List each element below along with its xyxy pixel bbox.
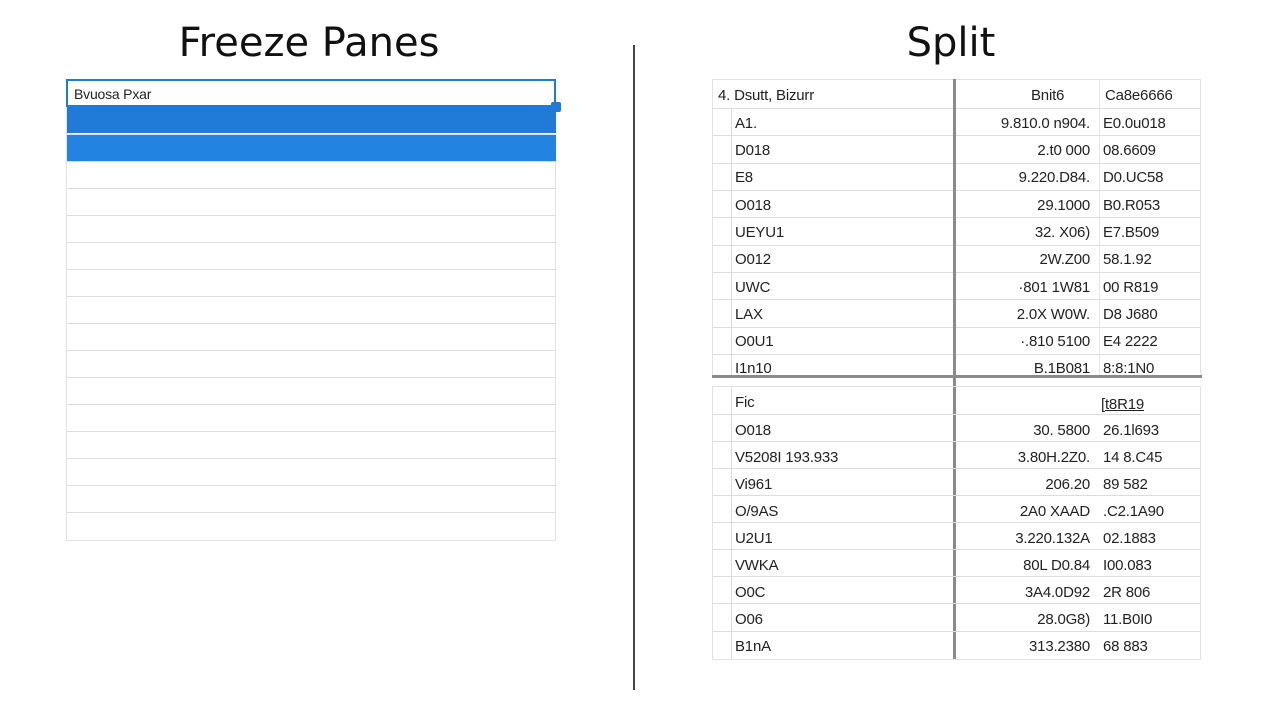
panel: split sheet bottom pane: 14 8.C45 — [1103, 449, 1162, 466]
panel: split sheet bottom pane: 68 883 — [1103, 638, 1148, 655]
title: Split: Split — [907, 20, 995, 66]
panel: split sheet top pane: E8 — [735, 169, 753, 186]
panel: split sheet top pane: 2.0X W0W. — [1017, 306, 1090, 323]
panel: split sheet top pane: Bnit6 — [1031, 87, 1064, 104]
panel: split sheet bottom pane: B1nA — [735, 638, 771, 655]
panel: split sheet top pane — [712, 79, 1201, 376]
panel: split sheet bottom pane: VWKA — [735, 557, 778, 574]
panel: split sheet top pane: UEYU1 — [735, 224, 784, 241]
split horizontal bar — [712, 375, 1202, 378]
panel: split sheet bottom pane: 02.1883 — [1103, 530, 1156, 547]
panel: split sheet bottom pane: 80L D0.84 — [1023, 557, 1090, 574]
panel: split sheet top pane: 08.6609 — [1103, 142, 1156, 159]
panel: split sheet bottom pane: 26.1l693 — [1103, 422, 1159, 439]
panel: split sheet top pane: E4 2222 — [1103, 333, 1157, 350]
panel: split sheet bottom pane: 30. 5800 — [1033, 422, 1090, 439]
panel: split sheet bottom pane: O06 — [735, 611, 763, 628]
panel: split sheet bottom pane: V5208I 193.933 — [735, 449, 838, 466]
panel: split sheet top pane: B0.R053 — [1103, 197, 1160, 214]
panel: split sheet top pane: I1n10 — [735, 360, 772, 377]
panel: split sheet top pane: 32. X06) — [1035, 224, 1090, 241]
panel: split sheet top pane: 29.1000 — [1037, 197, 1090, 214]
panel: split sheet top pane: D0.UC58 — [1103, 169, 1163, 186]
panel: split sheet top pane: D8 J680 — [1103, 306, 1157, 323]
panel: split sheet top pane: E7.B509 — [1103, 224, 1159, 241]
panel: split sheet top pane: 2W.Z00 — [1040, 251, 1090, 268]
split vertical bar — [953, 79, 956, 660]
panel: split sheet top pane: 2.t0 000 — [1037, 142, 1090, 159]
panel: split sheet top pane: 58.1.92 — [1103, 251, 1152, 268]
center divider — [633, 45, 635, 690]
panel: split sheet bottom pane: O/9AS — [735, 503, 778, 520]
panel: split sheet top pane: 8:8:1N0 — [1103, 360, 1154, 377]
panel: split sheet top pane: E0.0u018 — [1103, 115, 1166, 132]
panel: split sheet bottom pane: 2A0 XAAD — [1020, 503, 1090, 520]
panel: split sheet bottom pane: Fic — [735, 394, 754, 411]
panel: split sheet bottom pane — [712, 386, 1201, 660]
panel: split sheet bottom pane: 28.0G8) — [1037, 611, 1090, 628]
panel: split sheet bottom pane: O018 — [735, 422, 771, 439]
panel: split sheet bottom pane: O0C — [735, 584, 765, 601]
panel: split sheet top pane: 9.220.D84. — [1019, 169, 1090, 186]
panel: split sheet bottom pane: 11.B0I0 — [1103, 611, 1152, 628]
panel: split sheet bottom pane: 3A4.0D92 — [1025, 584, 1090, 601]
panel: split sheet bottom pane: I00.083 — [1103, 557, 1152, 574]
panel: split sheet top pane: 9.810.0 n904. — [1001, 115, 1090, 132]
panel: freeze panes sheet — [66, 79, 556, 541]
panel: split sheet top pane: ·801 1W81 — [1018, 279, 1090, 296]
panel: split sheet top pane: B.1B081 — [1034, 360, 1090, 377]
panel: split sheet top pane: LAX — [735, 306, 763, 323]
panel: split sheet top pane: O018 — [735, 197, 771, 214]
panel: split sheet bottom pane: 3.80H.2Z0. — [1018, 449, 1090, 466]
panel: split sheet top pane: Ca8e6666 — [1105, 87, 1173, 104]
panel: split sheet bottom pane: 2R 806 — [1103, 584, 1150, 601]
panel: split sheet top pane: UWC — [735, 279, 770, 296]
panel: split sheet top pane: 00 R819 — [1103, 279, 1158, 296]
panel: split sheet bottom pane: 313.2380 — [1029, 638, 1090, 655]
panel: split sheet bottom pane: [t8R19 — [1101, 396, 1144, 413]
panel: split sheet bottom pane: .C2.1A90 — [1103, 503, 1164, 520]
frozen blue rows — [67, 107, 556, 133]
panel: split sheet top pane: ·.810 5100 — [1020, 333, 1090, 350]
header cell selected: Bvuosa Pxar — [74, 86, 151, 102]
panel: split sheet top pane: 4. Dsutt, Bizurr — [718, 87, 814, 104]
title: Freeze Panes: Freeze Panes — [179, 20, 439, 66]
selection handle — [551, 102, 561, 112]
panel: split sheet top pane: O012 — [735, 251, 771, 268]
panel: split sheet bottom pane: 89 582 — [1103, 476, 1148, 493]
panel: split sheet top pane: A1. — [735, 115, 757, 132]
panel: split sheet bottom pane: U2U1 — [735, 530, 773, 547]
panel: split sheet top pane: D018 — [735, 142, 770, 159]
panel: split sheet top pane: O0U1 — [735, 333, 773, 350]
panel: split sheet bottom pane: Vi961 — [735, 476, 772, 493]
panel: split sheet bottom pane: 3.220.132A — [1015, 530, 1090, 547]
panel: split sheet bottom pane: 206.20 — [1045, 476, 1090, 493]
header cell selected — [66, 79, 556, 107]
